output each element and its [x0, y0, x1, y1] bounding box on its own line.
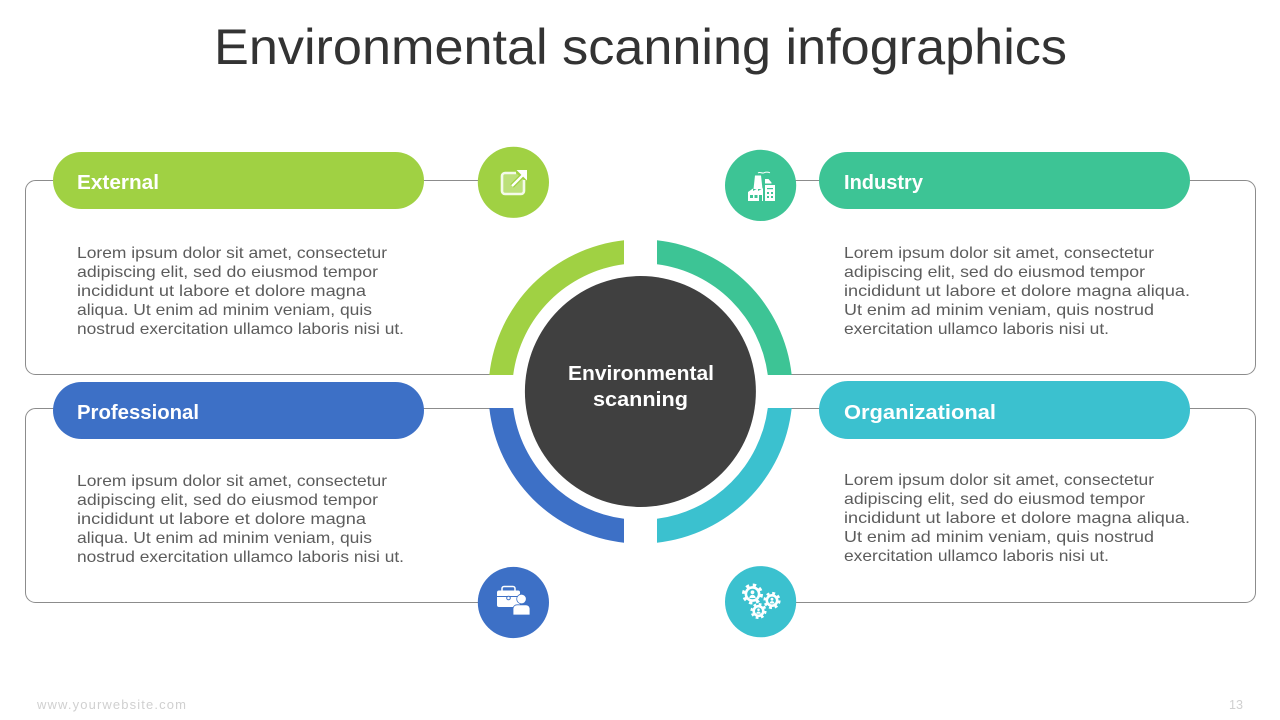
icon: external link	[478, 147, 549, 218]
external text block: aliqua. Ut enim ad minim veniam, quis	[77, 302, 372, 319]
professional text block: aliqua. Ut enim ad minim veniam, quis	[77, 530, 372, 547]
external heading pill	[53, 152, 424, 209]
external text block: nostrud exercitation ullamco laboris nisi ut.	[77, 321, 404, 338]
organizational heading pill	[819, 381, 1190, 439]
industry text block: incididunt ut labore et dolore magna aliqua.	[844, 283, 1190, 300]
external heading pill: External	[77, 172, 159, 194]
external text block: adipiscing elit, sed do eiusmod tempor	[77, 264, 379, 281]
industry text block: adipiscing elit, sed do eiusmod tempor	[844, 264, 1146, 281]
professional text block: incididunt ut labore et dolore magna	[77, 511, 366, 528]
organizational text block: Lorem ipsum dolor sit amet, consectetur	[844, 472, 1155, 489]
industry heading pill: Industry	[844, 172, 924, 194]
external text block	[77, 245, 404, 338]
professional text block: Lorem ipsum dolor sit amet, consectetur	[77, 473, 388, 490]
ring segment: professional	[489, 408, 624, 543]
industry text block: exercitation ullamco laboris nisi ut.	[844, 321, 1109, 338]
panel: organizational	[789, 381, 1256, 602]
center label: scanning	[593, 389, 688, 411]
center circle	[525, 276, 756, 507]
ring segment: external	[489, 240, 624, 375]
organizational text block	[844, 472, 1190, 565]
external text block: Lorem ipsum dolor sit amet, consectetur	[77, 245, 388, 262]
industry heading pill	[819, 152, 1190, 209]
panel: industry	[789, 152, 1256, 374]
icon: briefcase and person	[478, 567, 549, 638]
industry text block	[844, 245, 1190, 338]
center label	[568, 363, 714, 411]
ring diagram	[489, 240, 792, 543]
professional text block: adipiscing elit, sed do eiusmod tempor	[77, 492, 379, 509]
ring segment: industry	[657, 240, 792, 375]
external text block: incididunt ut labore et dolore magna	[77, 283, 366, 300]
organizational heading pill: Organizational	[844, 402, 996, 424]
panel: external	[26, 152, 492, 374]
professional heading pill	[53, 382, 424, 439]
industry text block: Ut enim ad minim veniam, quis nostrud	[844, 302, 1154, 319]
center label: Environmental	[568, 363, 714, 385]
organizational text block: exercitation ullamco laboris nisi ut.	[844, 548, 1109, 565]
title: Environmental scanning infographics	[214, 19, 1067, 75]
professional text block: nostrud exercitation ullamco laboris nisi ut.	[77, 549, 404, 566]
organizational text block: Ut enim ad minim veniam, quis nostrud	[844, 529, 1154, 546]
footer website: www.yourwebsite.com	[36, 697, 186, 712]
icon: gears	[725, 566, 796, 637]
organizational text block: adipiscing elit, sed do eiusmod tempor	[844, 491, 1146, 508]
page number: 13	[1229, 697, 1243, 712]
professional text block	[77, 473, 404, 566]
panel: professional	[26, 382, 492, 602]
organizational text block: incididunt ut labore et dolore magna aliqua.	[844, 510, 1190, 527]
ring segment: organizational	[657, 408, 792, 543]
industry text block: Lorem ipsum dolor sit amet, consectetur	[844, 245, 1155, 262]
professional heading pill: Professional	[77, 402, 199, 424]
icon: factory	[725, 150, 796, 221]
